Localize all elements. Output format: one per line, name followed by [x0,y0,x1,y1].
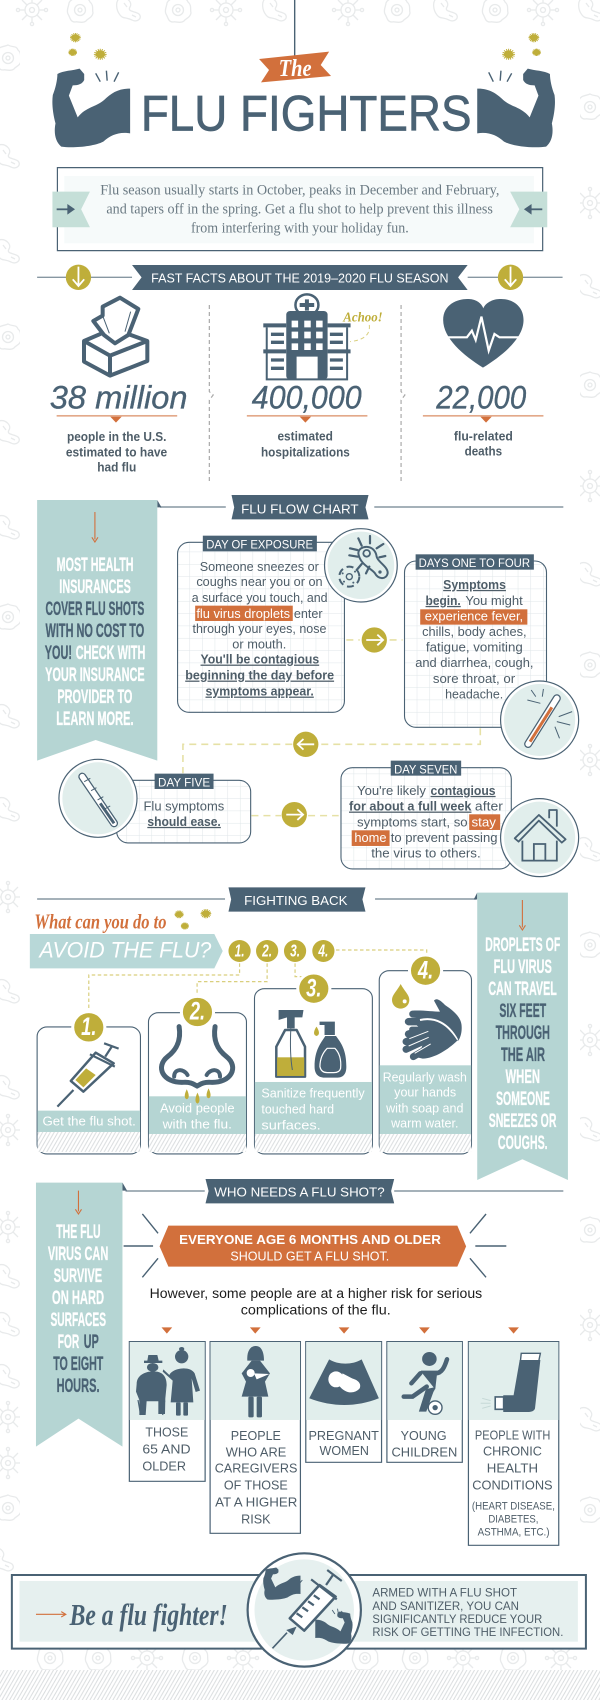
ribbon: left arrow [52,192,90,227]
card: pregnant women [306,1342,382,1462]
banner: The: The [279,55,312,82]
card: get the flu shot: 1. [81,1013,96,1041]
banner: avoid the flu: AVOID THE FLU? [38,939,212,963]
card: days one to four [405,554,579,759]
ribbon: droplets note [474,893,568,1180]
card: day of exposure: through your eyes, nose [192,622,326,636]
connector dashes [89,950,427,1010]
card: day seven: DAY SEVEN [394,762,457,776]
callout: Achoo: Achoo! [342,311,383,325]
icon: hospital [263,294,351,379]
text: higher risk: However, some people are at a higher risk for serious [150,1287,482,1302]
stat: 400,000 [247,294,383,459]
ribbon: insurance note: COVER FLU SHOTS [46,598,144,620]
ribbon: virus survival note: UP [84,1331,99,1353]
section: fighting back [30,887,568,1180]
banner: everyone age 6 months [160,1226,466,1267]
icon: left down arrow [66,265,91,290]
stat: 400,000: estimated [277,428,333,443]
card: day seven: stay [471,815,496,829]
heading: fast facts: FAST FACTS ABOUT THE 2019–2020 FLU SEASON [151,271,449,285]
heading: fighting back: FIGHTING BACK [244,893,348,908]
card: day seven: contagious [431,784,496,798]
card: sanitize: touched hard [261,1102,334,1116]
icon: elderly couple [136,1347,200,1416]
card: day seven [341,761,579,877]
heading: who needs a flu shot: WHO NEEDS A FLU SHOT? [214,1185,385,1199]
card: chronic conditions: DIABETES, [488,1514,538,1525]
card: sanitize: surfaces. [261,1118,321,1132]
heading: fast facts [132,265,468,290]
slogan: Be a flu fighter! [69,1599,228,1632]
text: higher risk: complications of the flu. [241,1304,391,1318]
card: day seven: after [475,799,503,813]
step markers: 1. [235,941,245,960]
stat: 22,000: 22,000 [435,380,527,416]
card: chronic conditions: (HEART DISEASE, [472,1501,555,1512]
closing text: SIGNIFICANTLY REDUCE YOUR [372,1612,542,1626]
card: day of exposure: a surface you touch, and [192,591,328,605]
card: days one to four: experience fever, [425,610,523,623]
icon: right down arrow [498,265,523,290]
burst lines [124,1214,506,1277]
panel: intro [52,168,547,251]
card: day of exposure: or mouth. [232,638,286,651]
card: get the flu shot [37,1012,140,1154]
icon: inhaler [481,1353,540,1412]
card: days one to four: begin. [426,594,461,608]
icon: tissue box [84,298,147,376]
heading: who needs a flu shot [206,1179,394,1203]
card: chronic conditions: HEALTH [487,1461,538,1475]
stat: 38 million: had flu [97,460,136,474]
card: avoid people: with the flu. [162,1117,232,1131]
card: day of exposure: Someone sneezes or [200,560,319,574]
card: those 65 and older: OLDER [142,1459,186,1473]
stat: 38 million: people in the U.S. [67,429,166,444]
stat: 22,000 [423,299,543,458]
header [52,0,555,251]
card: days one to four: fatigue, vomiting [426,641,523,654]
card: day five: Flu symptoms [144,799,224,813]
card: caregivers: CAREGIVERS [215,1461,297,1475]
intro text [100,182,499,236]
card: day of exposure [178,529,397,712]
footer hatch strip [0,1670,600,1700]
banner: avoid the flu [30,934,223,968]
ribbon: virus survival note: SURVIVE [54,1265,102,1287]
icon: child with ball [404,1352,447,1414]
ribbon: right arrow [510,192,547,227]
step markers: 2. [262,941,272,960]
icon: nose [161,1027,233,1104]
card: day seven: You're likely [357,784,426,798]
closing text [372,1586,563,1639]
section: flu flow chart [37,495,579,877]
icon: ultrasound [309,1359,379,1405]
card: wash hands: Regularly wash [383,1071,467,1084]
card: day five: DAY FIVE [158,775,210,789]
closing text: ARMED WITH A FLU SHOT [372,1586,517,1599]
ribbon: insurance note [37,500,161,761]
stat: 38 million: estimated to have [66,445,167,459]
card: wash hands: your hands [394,1085,456,1099]
ribbon: droplets note: SIX FEET [499,1000,546,1022]
heading: fighting back [228,887,365,912]
card: young children [387,1342,462,1462]
stat: 22,000: flu-related [454,428,513,443]
card: day seven: for about a full week [349,799,472,813]
card: caregivers: PEOPLE [231,1429,281,1443]
card: day seven: home [354,831,387,845]
icon: house [501,799,579,877]
intro text: and tapers off in the spring. Get a flu shot to help prevent this illness [106,201,493,217]
card: those 65 and older [129,1342,205,1481]
card: day of exposure: coughs near you or on [196,575,323,589]
step markers: 3. [290,941,300,960]
card: wash hands: 4. [417,956,433,984]
card: chronic conditions [468,1342,559,1545]
card: day five [59,759,251,843]
card: day of exposure: enter [294,607,323,621]
card: those 65 and older: THOSE [145,1425,188,1439]
card: day of exposure: flu virus droplets [196,607,290,621]
arrow: orange [36,1612,66,1617]
card: days one to four: Symptoms [443,578,506,592]
card: days one to four: headache. [445,688,503,701]
card: days one to four: chills, body aches, [422,625,527,639]
intro text: Flu season usually starts in October, peaks in December and February, [100,182,499,198]
icon: right flexing arm [477,33,555,147]
panel: be a flu fighter [12,1553,586,1667]
card: days one to four: sore throat, or [433,672,516,686]
title: FLU FIGHTERS: FLU FIGHTERS [141,86,471,142]
ribbon: virus survival note [36,1183,127,1447]
card: chronic conditions: PEOPLE WITH [475,1428,550,1442]
card: days one to four: DAYS ONE TO FOUR [419,556,530,570]
stat: 22,000: deaths [465,444,502,458]
stat: 400,000: hospitalizations [261,445,350,459]
card: days one to four: and diarrhea, cough, [415,656,533,670]
ribbon: droplets note: THE AIR [501,1044,545,1066]
banner: The [259,52,331,82]
card: sanitize [254,973,372,1154]
ribbon: virus survival note: SURFACES [51,1309,106,1331]
card: day five: should ease. [147,815,221,829]
card: chronic conditions: CONDITIONS [472,1478,553,1492]
icon: cooling thermometer [59,759,137,837]
icon: spray bottle and soap [276,1010,346,1078]
card: chronic conditions: CHRONIC [483,1444,542,1458]
card: sanitize: Sanitize frequently [261,1086,365,1100]
banner: everyone age 6 months: EVERYONE AGE 6 MONTHS AND OLDER [179,1233,441,1248]
heading: what can you do: What can you do to [34,910,166,933]
card: caregivers: WHO ARE [226,1445,286,1459]
ribbon: insurance note: YOU! [45,642,72,664]
icon: washing hands and drop [392,984,462,1059]
card: wash hands: with soap and [385,1101,463,1115]
callout: Achoo [342,311,383,342]
intro text: from interfering with your holiday fun. [191,220,409,236]
icon: heart with pulse [443,299,524,368]
connector arrows [183,627,480,827]
stat: 38 million: 38 million [50,380,188,416]
card: day of exposure: beginning the day before [185,669,334,682]
ribbon: virus survival note: THE FLU [56,1221,101,1243]
ribbon: insurance note: YOUR INSURANCE [45,664,145,686]
step markers: 4. [318,941,328,960]
card: day seven: symptoms start, so [357,815,468,829]
ribbon: virus survival note: VIRUS CAN [48,1243,108,1265]
card: caregivers [210,1342,300,1533]
card: those 65 and older: 65 AND [142,1442,191,1456]
text: higher risk [150,1287,482,1318]
ribbon: insurance note: CHECK WITH [76,642,145,664]
ribbon: virus survival note: ON HARD [52,1287,104,1309]
heading: flu flow chart [232,495,369,519]
card: caregivers: OF THOSE [224,1478,288,1492]
icon: left flexing arm [52,33,130,147]
card: wash hands: warm water. [390,1116,458,1130]
card: day of exposure: DAY OF EXPOSURE [206,538,313,551]
ribbon: insurance note: PROVIDER TO [57,686,132,708]
card: day seven: the virus to others. [371,846,481,860]
section: fast facts [37,265,563,482]
pointers [161,1327,519,1334]
card: young children: YOUNG [401,1429,447,1443]
card: pregnant women: WOMEN [320,1444,369,1458]
card: avoid people: Avoid people [160,1101,235,1115]
card: get the flu shot: Get the flu shot. [42,1114,136,1128]
ribbon: insurance note: MOST HEALTH [57,554,134,576]
card: avoid people [148,996,246,1154]
stat: 400,000: 400,000 [252,380,362,416]
card: day seven: to prevent passing [391,831,498,845]
card: avoid people: 2. [189,997,205,1025]
card: caregivers: RISK [241,1512,271,1526]
card: chronic conditions: ASTHMA, ETC.) [478,1527,550,1538]
icon: caregiver with baby [242,1346,270,1417]
ribbon: virus survival note: FOR [58,1331,79,1353]
ribbon: insurance note: WITH NO COST TO [46,620,144,642]
icon: syringe [57,1043,119,1107]
ribbon: virus survival note: TO EIGHT [53,1353,103,1375]
closing text: AND SANITIZER, YOU CAN [372,1599,519,1613]
stat: 38 million [50,380,188,474]
card: pregnant women: PREGNANT [308,1429,380,1443]
ribbon: droplets note: WHEN [506,1066,540,1088]
icon: syringe and arms emblem [248,1553,361,1667]
card: wash hands [379,955,471,1154]
heading: flu flow chart: FLU FLOW CHART [241,501,359,516]
step markers [228,940,334,962]
icon: hot thermometer [501,681,579,759]
card: young children: CHILDREN [392,1445,457,1459]
section: who needs a flu shot [36,1179,563,1545]
card: caregivers: AT A HIGHER [215,1495,297,1509]
ribbon: insurance note: LEARN MORE. [56,708,134,730]
card: sanitize: 3. [306,974,321,1002]
banner: everyone age 6 months: SHOULD GET A FLU SHOT. [230,1249,389,1264]
card: days one to four: You might [465,594,523,608]
ribbon: virus survival note: HOURS. [57,1375,100,1397]
icon: germs [339,536,388,587]
ribbon: insurance note: INSURANCES [59,576,131,598]
card: day of exposure: You'll be contagious [201,653,320,666]
card: day of exposure: symptoms appear. [206,685,314,698]
